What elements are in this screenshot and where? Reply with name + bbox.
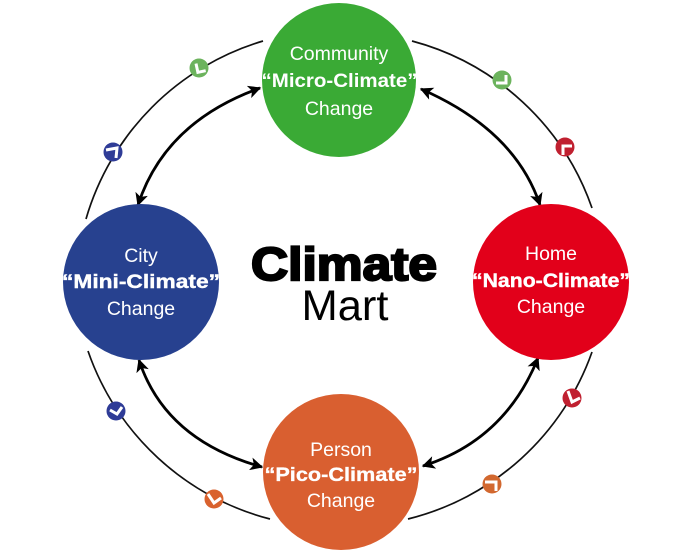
badge: green top right [492, 70, 512, 90]
badge: blue bottom left [106, 402, 126, 420]
circle: person pico-climate: Change [307, 490, 375, 512]
badge: orange bottom left [204, 490, 224, 508]
center title [251, 238, 437, 330]
circle: home nano-climate: “Nano-Climate” [472, 270, 630, 292]
badge: red bottom right [562, 388, 582, 408]
circle: city mini-climate: “Mini-Climate” [62, 271, 220, 293]
circle: city mini-climate: Change [107, 298, 175, 320]
arrow: community to home [421, 89, 540, 205]
badge: green top left [190, 58, 208, 78]
outer arc: bottom right [408, 352, 592, 519]
circle: city mini-climate [62, 204, 220, 360]
center title: Climate [251, 238, 437, 290]
circle: home nano-climate [472, 204, 630, 360]
circle: person pico-climate: Person [310, 439, 372, 461]
circle: community micro-climate: Community [290, 43, 389, 65]
outer arc: top right [412, 41, 592, 208]
circle: home nano-climate: Change [517, 296, 585, 318]
circle: person pico-climate [263, 394, 419, 550]
outer arc: top left [86, 41, 263, 219]
circle: city mini-climate: City [124, 245, 158, 267]
circle: community micro-climate: Change [305, 98, 373, 120]
arrow: city to person [139, 360, 262, 467]
badge: orange bottom right [482, 474, 502, 494]
circle: community micro-climate [262, 3, 418, 157]
outer arc: bottom left [88, 351, 270, 519]
circle: person pico-climate: “Pico-Climate” [264, 464, 418, 486]
badge: blue top left [104, 142, 122, 162]
badge: red top right [556, 138, 574, 156]
arrow: home to person [423, 358, 538, 466]
arrow: community to city [138, 88, 260, 205]
circle: community micro-climate: “Micro-Climate” [262, 70, 418, 92]
center title: Mart [302, 282, 389, 330]
circle: home nano-climate: Home [525, 243, 577, 265]
